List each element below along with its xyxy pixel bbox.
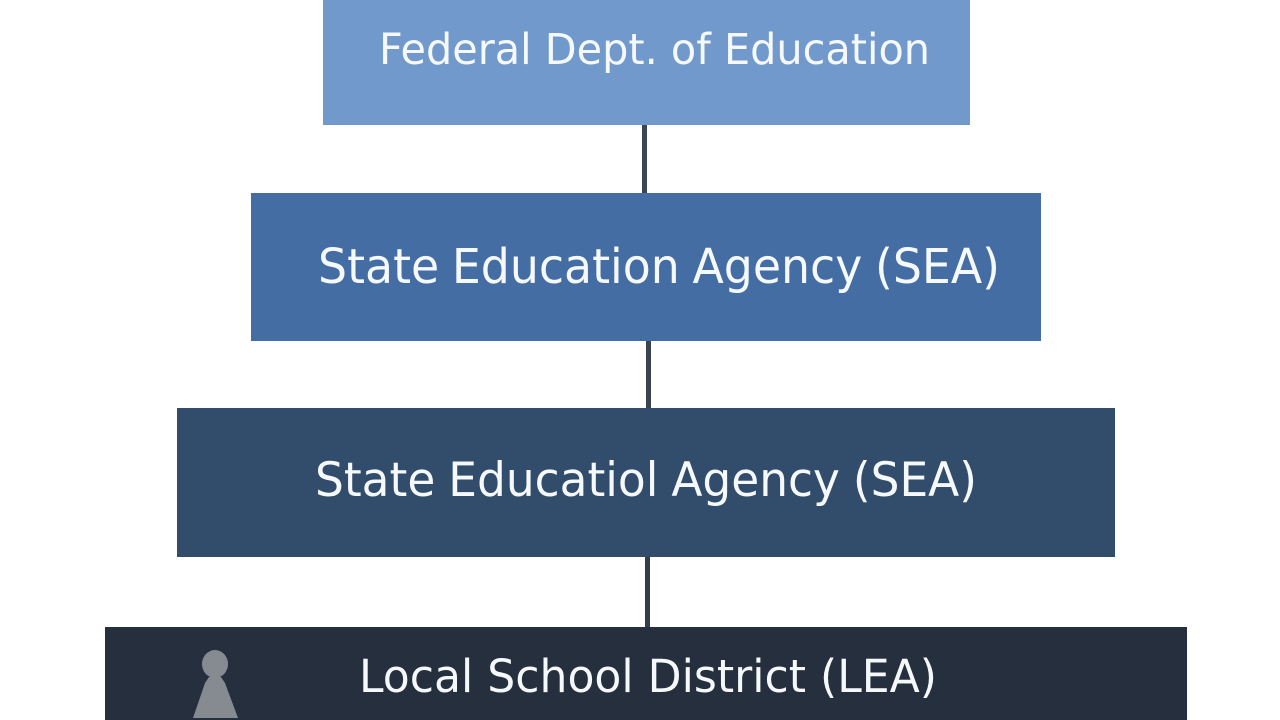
- box: Federal Dept. of Education: Federal Dept. of Education: [379, 25, 930, 75]
- box: Local School District: Local School District (LEA): [359, 650, 937, 703]
- connector: federal to state: [642, 125, 647, 194]
- icon: person: [193, 650, 238, 718]
- box: State Education Agency: [251, 193, 1041, 341]
- box: Local School District: [105, 627, 1187, 720]
- connector: second state to local: [645, 557, 650, 627]
- box: State Education Agency: State Education Agency (SEA): [318, 239, 1000, 295]
- box: State Educatiol Agency: State Educatiol Agency (SEA): [315, 453, 977, 508]
- box: State Educatiol Agency: [177, 408, 1115, 557]
- connector: state to second state: [646, 341, 651, 408]
- box: Federal Dept. of Education: [323, 0, 970, 125]
